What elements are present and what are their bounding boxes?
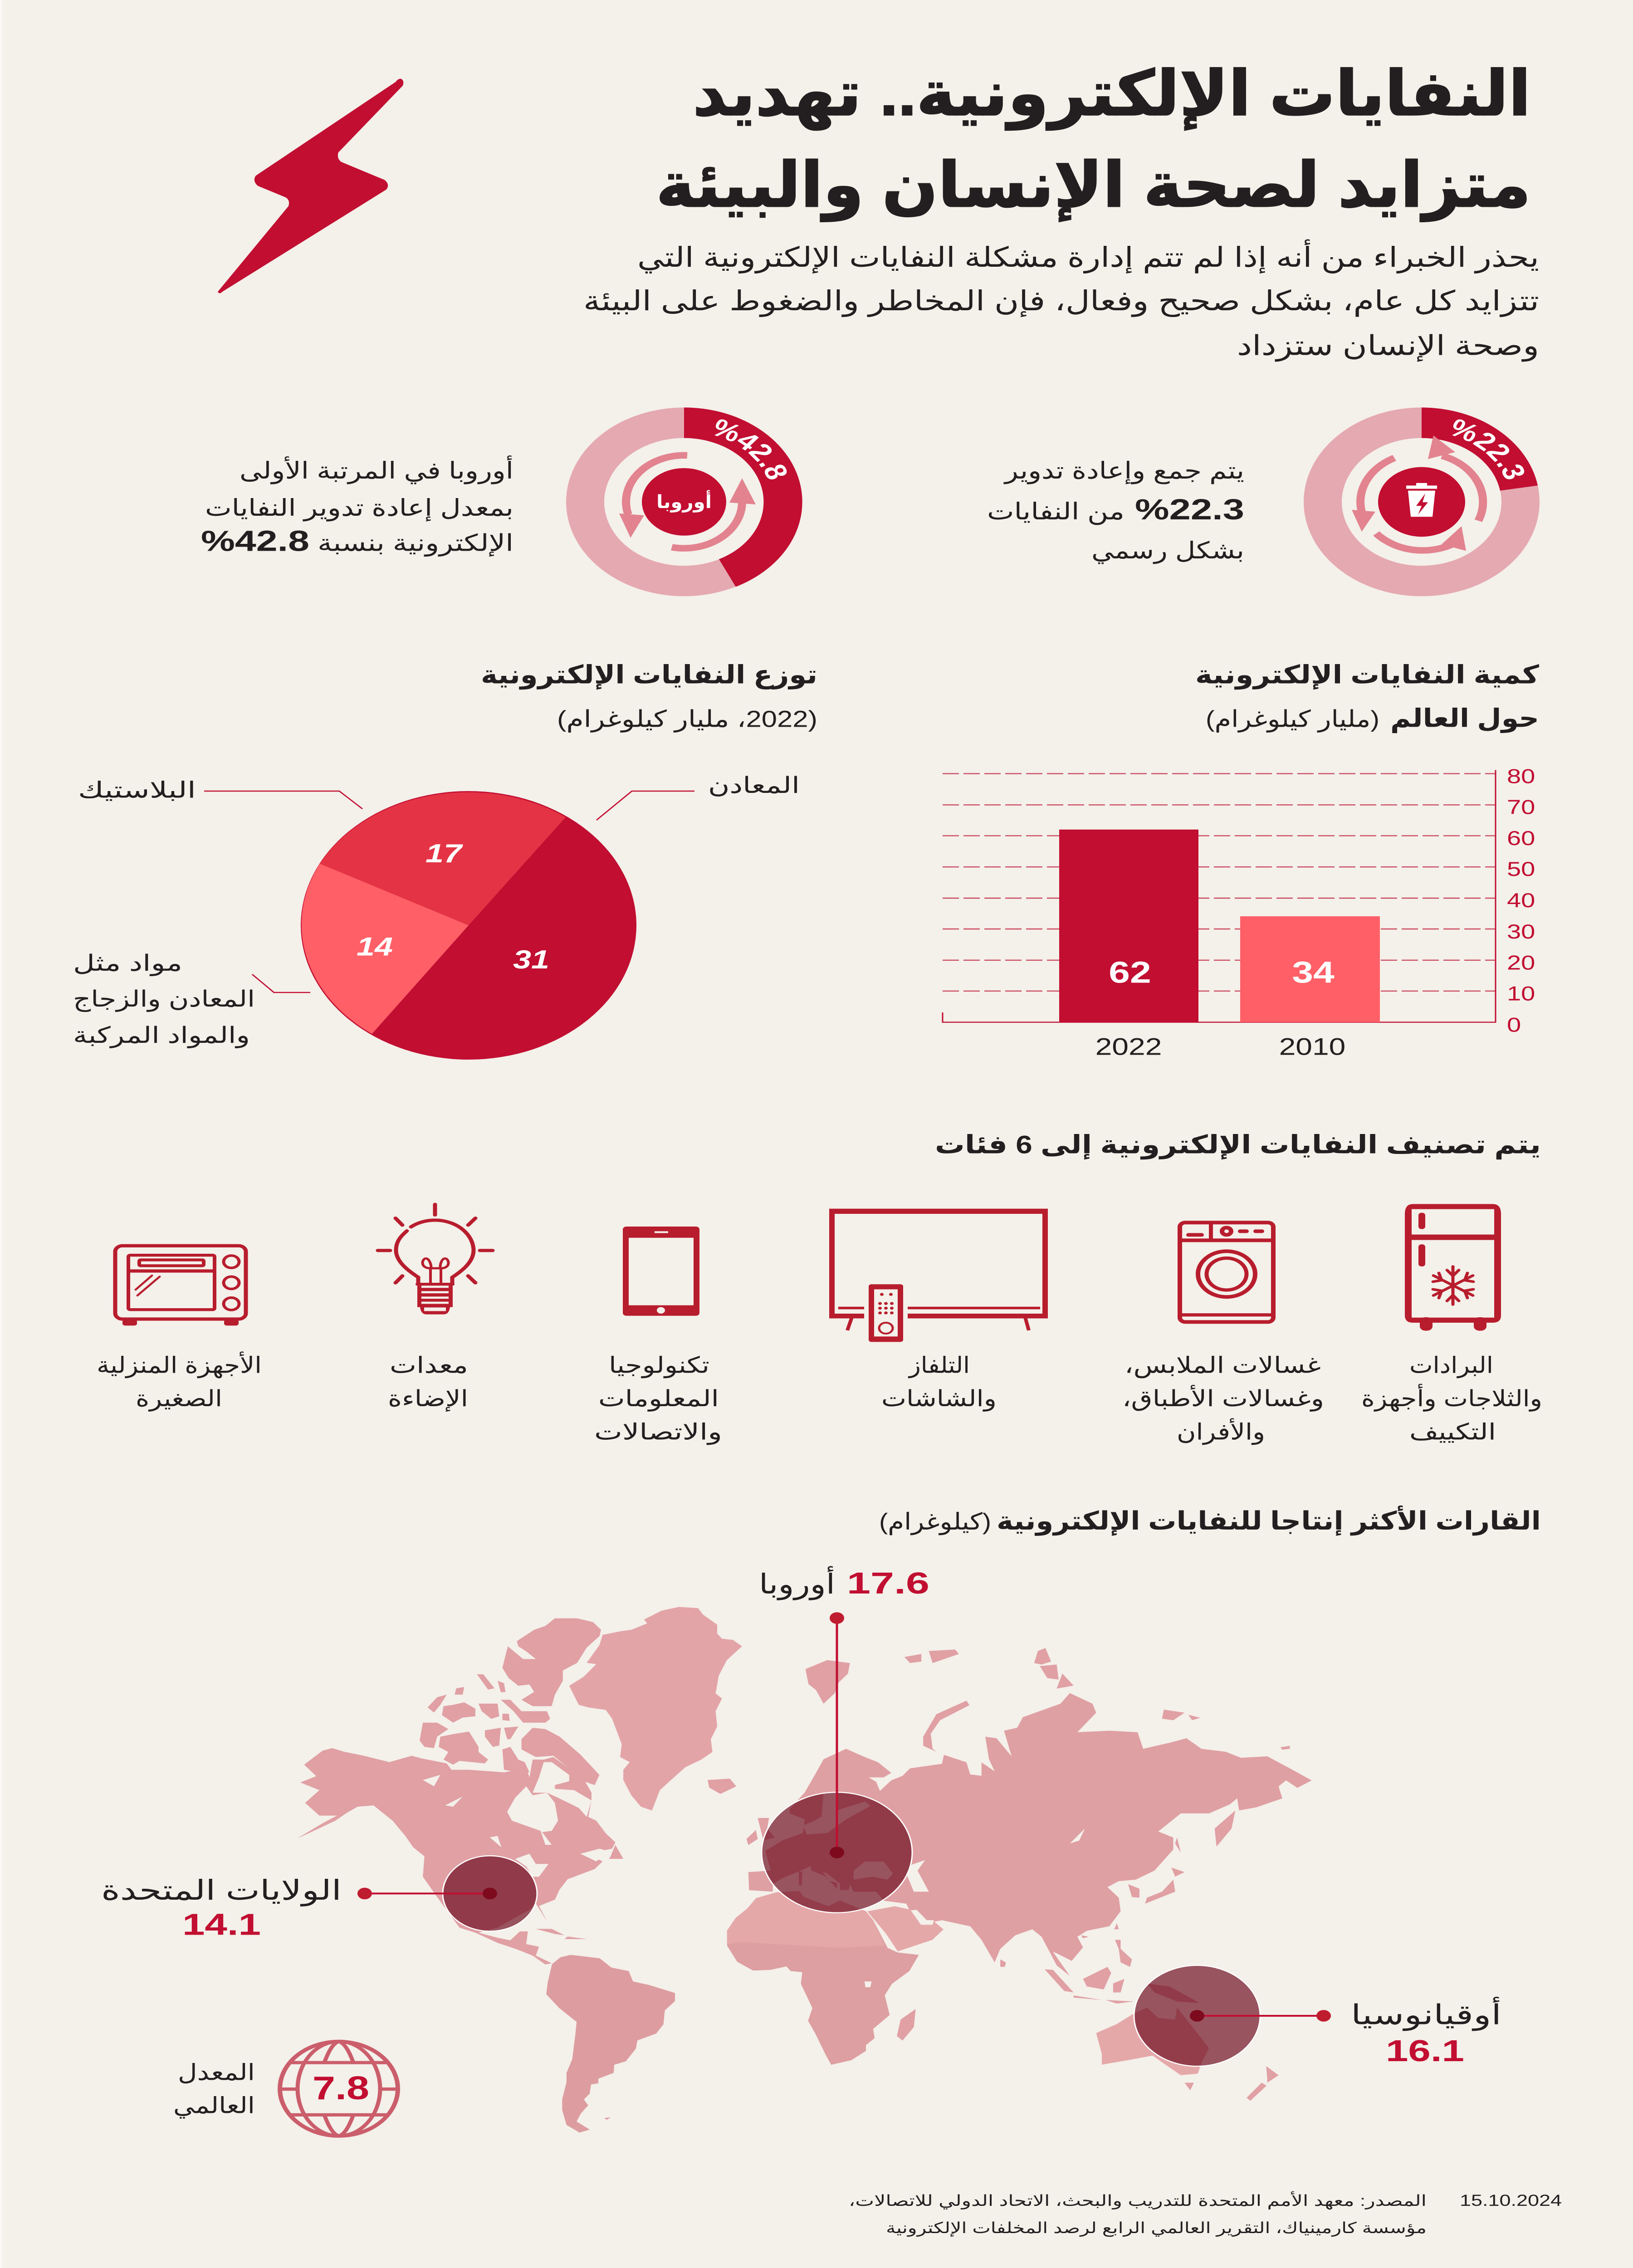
donut text: 42.8 percent (201, 455, 513, 557)
bar chart: 62 (1109, 955, 1151, 989)
pie chart: 31 (513, 945, 549, 974)
bubble: Oceania (1134, 1965, 1331, 2066)
bar chart: 20 (1507, 951, 1535, 974)
icon: trash can (1406, 483, 1437, 517)
donut text: 22.3 percent: بشكل رسمي (1091, 538, 1244, 564)
bar chart: 60 (1507, 827, 1535, 850)
donut: 42.8 percent: %42.8 (707, 413, 795, 484)
icon: oven (115, 1246, 246, 1325)
intro text: يحذر الخبراء من أنه إذا لم تتم إدارة مشكلة النفايات الإلكترونية التي (637, 239, 1539, 274)
label: Oceania: 16.1 (1386, 2034, 1464, 2068)
bar chart: 0 (1507, 1013, 1521, 1036)
label: Europe: أوروبا (759, 1566, 835, 1600)
category labels: والاتصالات (594, 1419, 722, 1445)
category labels: والشاشات (881, 1386, 997, 1412)
title (656, 59, 1531, 222)
donut: 22.3 percent: %22.3 (1444, 413, 1532, 484)
heading: distribution of e-waste (481, 661, 817, 733)
icon: television with remote (829, 1209, 1048, 1342)
pie labels: البلاستيك (78, 777, 196, 802)
label: Europe (759, 1566, 929, 1600)
category labels: معدات (390, 1352, 468, 1378)
donut text: 22.3 percent: يتم جمع وإعادة تدوير (1003, 458, 1244, 484)
icon: washing machine (1178, 1222, 1275, 1322)
donut text: 42.8 percent: الإلكترونية بنسبة (318, 530, 513, 557)
bar: 2010 (1240, 916, 1380, 1022)
donut text: 42.8 percent: %42.8 (201, 525, 309, 557)
bubble: USA (357, 1856, 537, 1931)
bar chart: 30 (1507, 920, 1535, 943)
heading: continents (879, 1505, 1541, 1536)
label: USA: 14.1 (182, 1908, 261, 1942)
category labels: الإضاءة (388, 1386, 468, 1412)
label: Oceania: أوقيانوسيا (1351, 1996, 1501, 2031)
category labels: التكييف (1409, 1419, 1496, 1444)
category labels: والأفران (1177, 1418, 1265, 1445)
source note (849, 2191, 1427, 2237)
intro text: تتزايد كل عام، بشكل صحيح وفعال، فإن المخاطر والضغوط على البيئة (583, 285, 1539, 317)
donut: 22.3 percent (1323, 407, 1538, 581)
source note: المصدر: معهد الأمم المتحدة للتدريب والبحث، الاتحاد الدولي للاتصالات، (849, 2191, 1427, 2210)
bar chart: 2010 (1279, 1033, 1345, 1060)
category labels: الأجهزة المنزلية (97, 1351, 262, 1378)
donut text: 22.3 percent: %22.3 (1135, 493, 1244, 526)
pie labels: مواد مثل (73, 950, 182, 976)
category labels: المعلومات (598, 1386, 719, 1412)
intro text: وصحة الإنسان ستزداد (1237, 330, 1539, 362)
donut: 42.8 percent (585, 407, 802, 587)
donut: 42.8 percent: أوروبا (656, 490, 712, 513)
bar: 2022 (1059, 830, 1198, 1022)
icon: globe average (280, 2042, 398, 2136)
bar chart (943, 765, 1535, 1060)
intro text (583, 239, 1539, 362)
world map (297, 1607, 1312, 2132)
heading: amount of e-waste: حول العالم (1390, 704, 1539, 733)
label: USA: الولايات المتحدة (101, 1875, 342, 1906)
heading: distribution of e-waste: توزع النفايات الإلكترونية (481, 661, 817, 690)
pie chart (301, 791, 636, 1060)
bar chart: 50 (1507, 858, 1535, 880)
icon: tablet (623, 1227, 699, 1316)
pie chart: 14 (357, 932, 393, 961)
date: 15.10.2024 (1460, 2192, 1562, 2209)
category labels: التلفاز (908, 1352, 970, 1378)
heading: distribution of e-waste: (2022، مليار كيلوغرام) (557, 706, 817, 733)
label: Oceania (1351, 1996, 1501, 2068)
pie labels: المعادن والزجاج (73, 986, 255, 1012)
pie labels (73, 772, 800, 1049)
label: USA (101, 1875, 342, 1942)
pie chart: 17 (425, 839, 463, 868)
donut text: 22.3 percent: من النفايات (987, 499, 1125, 525)
bar chart: 80 (1507, 765, 1535, 787)
heading: continents: (كيلوغرام) (879, 1509, 991, 1535)
icon: globe average: 7.8 (313, 2070, 369, 2107)
category labels (97, 1351, 1542, 1445)
icon: lightning bolt (218, 79, 403, 293)
pie labels: المعادن (708, 772, 800, 798)
heading: six categories: يتم تصنيف النفايات الإلكترونية إلى 6 فئات (935, 1131, 1541, 1160)
category labels: وغسالات الأطباق، (1122, 1384, 1324, 1412)
heading: amount of e-waste: كمية النفايات الإلكترونية (1195, 661, 1539, 690)
heading: amount of e-waste (1195, 661, 1539, 733)
icon: light bulb (378, 1204, 493, 1315)
category labels: الصغيرة (136, 1386, 222, 1412)
category labels: تكنولوجيا (609, 1352, 709, 1378)
label: Europe: 17.6 (847, 1566, 929, 1600)
label: global average (173, 2060, 255, 2119)
category labels: والثلاجات وأجهزة (1361, 1384, 1542, 1412)
bubble: Europe (762, 1612, 912, 1913)
pie labels: والمواد المركبة (73, 1022, 250, 1049)
label: global average: المعدل (178, 2060, 255, 2085)
heading: continents: القارات الأكثر إنتاجا للنفايات الإلكترونية (997, 1505, 1541, 1536)
donut text: 22.3 percent (987, 458, 1244, 564)
category labels: غسالات الملابس، (1125, 1352, 1321, 1378)
bar chart: 2022 (1095, 1033, 1162, 1060)
heading: amount of e-waste: (مليار كيلوغرام) (1206, 706, 1379, 733)
bar chart: 10 (1507, 982, 1535, 1005)
icon: fridge (1405, 1204, 1501, 1331)
donut text: 42.8 percent: أوروبا في المرتبة الأولى (240, 455, 513, 484)
bar chart: 70 (1507, 796, 1535, 818)
donut text: 42.8 percent: بمعدل إعادة تدوير النفايات (205, 495, 513, 522)
bar chart: 40 (1507, 889, 1535, 912)
source note: مؤسسة كارمينياك، التقرير العالمي الرابع لرصد المخلفات الإلكترونية (886, 2220, 1427, 2237)
category labels: البرادات (1409, 1352, 1493, 1378)
bar chart: 34 (1292, 955, 1335, 989)
label: global average: العالمي (173, 2092, 255, 2119)
